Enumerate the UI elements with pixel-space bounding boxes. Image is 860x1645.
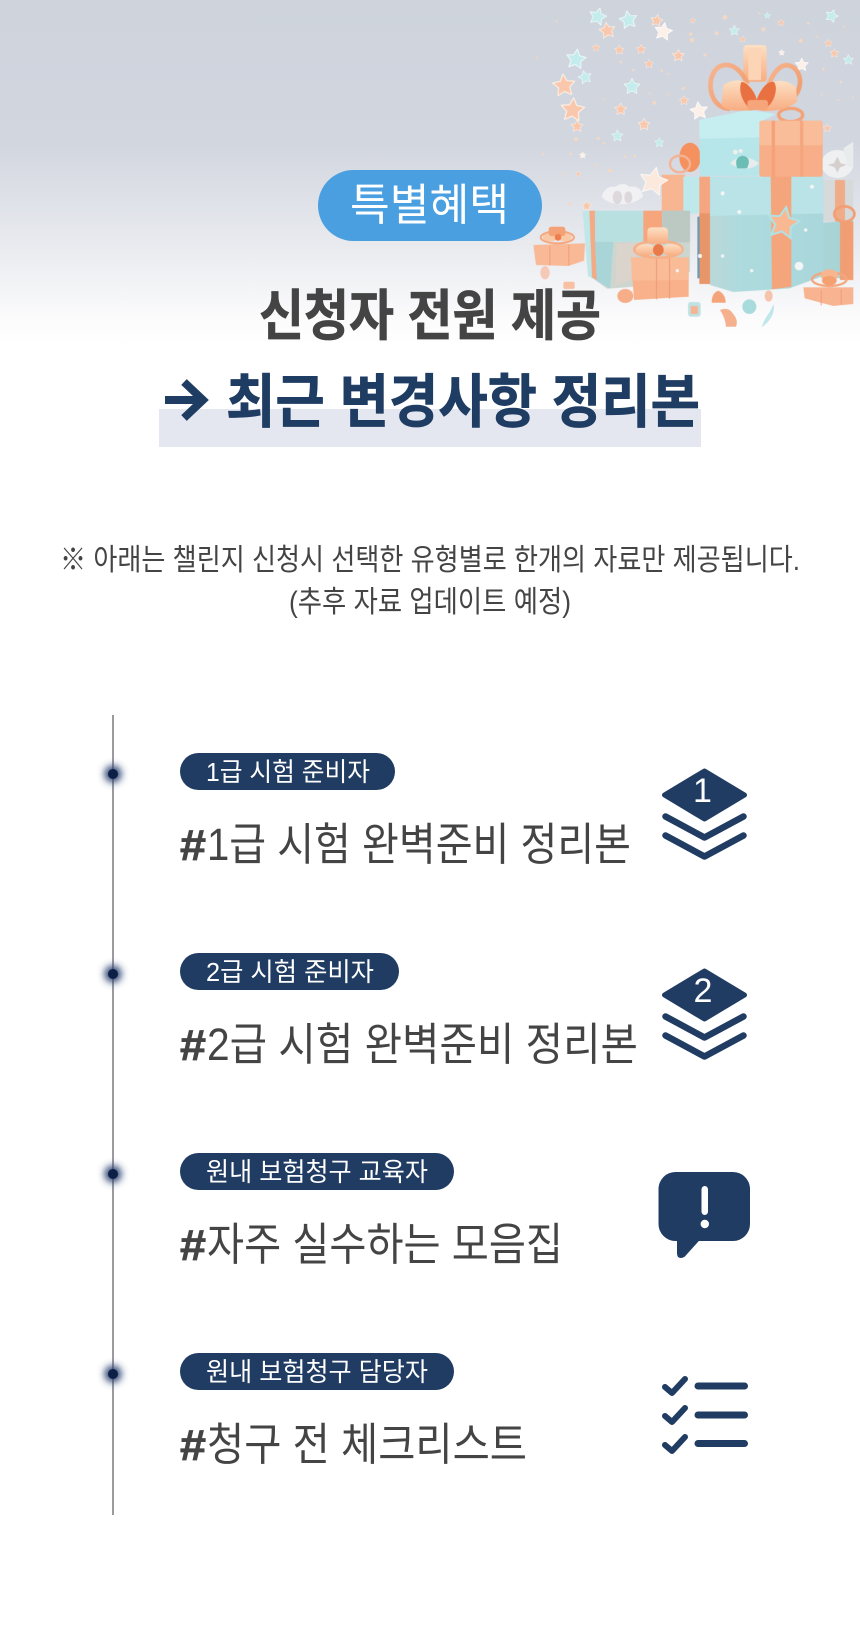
heading: line 2 with highlight (159, 370, 701, 447)
pill label 2: 2급 시험 준비자 (206, 957, 374, 987)
item 2 (104, 953, 744, 1070)
timeline dot 4 (104, 1366, 122, 1382)
falling small shapes (539, 266, 774, 327)
box: front peach (631, 227, 689, 300)
icon: layers 2: 2 (694, 972, 712, 1010)
pill label 3 (180, 1153, 454, 1190)
box: large teal (683, 176, 823, 292)
item title 3: # (180, 1221, 206, 1270)
timeline line (112, 715, 114, 1515)
pill label 4: 원내 보험청구 담당자 (206, 1357, 428, 1387)
pill label 4 (180, 1353, 454, 1390)
bow: main (710, 45, 800, 111)
item 1 (104, 753, 744, 870)
icon: layers 1: 1 (693, 772, 712, 810)
item 4 (104, 1353, 744, 1470)
notice text (60, 544, 800, 619)
timeline dot 3 (104, 1166, 122, 1182)
box: back right grey (821, 142, 853, 222)
pill label 3: 원내 보험청구 교육자 (206, 1157, 428, 1187)
item 3 (104, 1153, 750, 1270)
big cream star (637, 164, 670, 196)
pill label 1 (180, 753, 395, 790)
timeline dot 1 (104, 766, 122, 782)
box: left teal (583, 184, 690, 289)
bow behind peach box (779, 108, 803, 122)
item title 2: 2급 시험 완벽준비 정리본 (207, 1019, 638, 1070)
icon: arrow (165, 382, 203, 418)
icon: alert speech bubble (658, 1172, 750, 1257)
peach bow and box behind big box (662, 143, 701, 214)
stars (536, 6, 854, 210)
badge: special benefit: 특별혜택 (350, 181, 509, 230)
item title 1: # (180, 821, 206, 870)
heading: line 1: 신청자 전원 제공 (259, 285, 601, 347)
box: small left peach (533, 227, 585, 266)
item title 4: # (180, 1421, 206, 1470)
box: top teal (699, 110, 776, 176)
pill label 1: 1급 시험 준비자 (206, 757, 370, 787)
header gradient background (0, 0, 860, 345)
notice text: (추후 자료 업데이트 예정) (289, 586, 571, 619)
timeline dot 2 (104, 966, 122, 982)
box: right teal (822, 206, 854, 280)
icon: layers 1 (664, 771, 744, 856)
heading: line 2 with highlight: 최근 변경사항 정리본 (226, 370, 700, 435)
badge: special benefit (318, 170, 542, 241)
pill label 2 (180, 953, 399, 990)
item title 3: 자주 실수하는 모음집 (207, 1219, 563, 1270)
icon: layers 2 (664, 971, 744, 1056)
box: small right peach (803, 269, 853, 306)
illustration: gift boxes and stars (533, 6, 854, 327)
item title 4: 청구 전 체크리스트 (207, 1419, 527, 1470)
box: top peach (759, 121, 823, 177)
item title 2: # (180, 1021, 206, 1070)
item title 1: 1급 시험 완벽준비 정리본 (207, 819, 631, 870)
icon: checklist (665, 1379, 744, 1451)
